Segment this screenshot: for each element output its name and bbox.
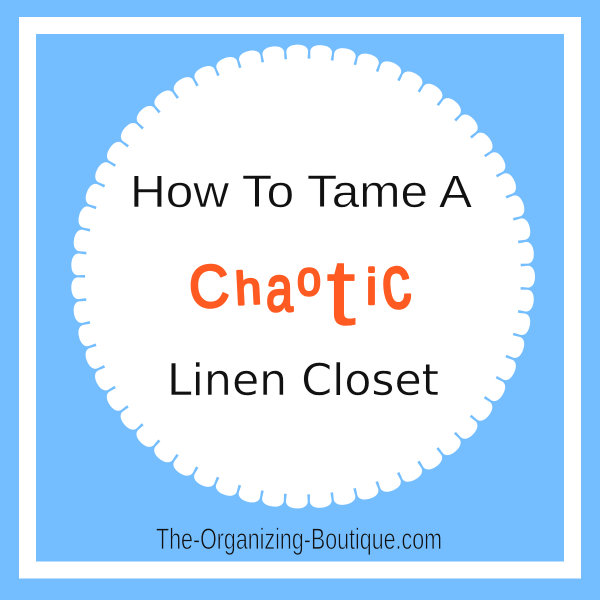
website footer: The-Organizing-Boutique.com bbox=[156, 523, 442, 556]
title line 3: Linen Closet bbox=[167, 355, 439, 406]
title line 1: How To Tame A bbox=[130, 166, 472, 217]
title word: Chaotic: C bbox=[187, 252, 231, 321]
title word: Chaotic: i bbox=[366, 259, 377, 315]
title word: Chaotic: t bbox=[326, 240, 356, 346]
title word: Chaotic: c bbox=[377, 239, 415, 326]
scalloped white circle bbox=[71, 44, 535, 509]
title word: Chaotic: a bbox=[266, 252, 294, 325]
title word: Chaotic bbox=[187, 239, 415, 346]
title word: Chaotic: o bbox=[297, 252, 321, 306]
title word: Chaotic: h bbox=[234, 261, 262, 315]
